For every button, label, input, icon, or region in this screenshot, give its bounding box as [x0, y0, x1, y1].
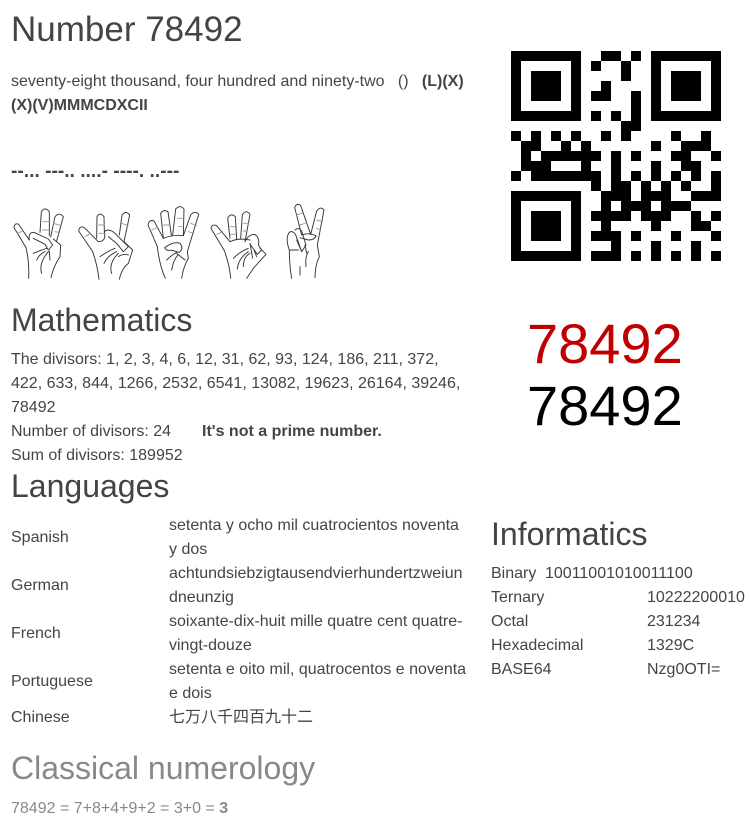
number in words and roman numeral — [11, 73, 464, 114]
text block: divisors: The divisors: 1, 2, 3, 4, 6, 12, 31, 62, 93, 124, 186, 211, 372, — [11, 351, 439, 368]
number in words and roman numeral: (X)(V)MMMCDXCII — [11, 97, 148, 114]
number in words and roman numeral: seventy-eight thousand, four hundred and ninety-two () (L)(X) — [11, 73, 464, 90]
heading: Informatics: Informatics — [491, 516, 647, 552]
big number black: 78492 — [527, 374, 683, 437]
table: languages: setenta e oito mil, quatrocentos e noventa — [169, 661, 466, 678]
table: languages: Portuguese — [11, 673, 93, 690]
table: informatics: BASE64 — [491, 661, 551, 678]
table: languages: e dois — [169, 685, 212, 702]
text block: divisors: Number of divisors: 24 — [11, 423, 171, 440]
table: languages: French — [11, 625, 61, 642]
table: informatics — [491, 565, 745, 678]
heading: Mathematics: Mathematics — [11, 302, 192, 338]
text block: numerology sum: 78492 = 7+8+4+9+2 = 3+0 = 3 — [11, 800, 228, 817]
table: informatics: 10222200010 — [647, 589, 745, 606]
table: informatics: Ternary — [491, 589, 544, 606]
title: Number 78492 — [11, 10, 243, 49]
table: languages: Chinese — [11, 709, 70, 726]
table: informatics: 231234 — [647, 613, 700, 630]
big number red: 78492 — [527, 312, 683, 375]
table: languages: y dos — [169, 541, 207, 558]
table: languages: setenta y ocho mil cuatrocientos noventa — [169, 517, 459, 534]
table: informatics: 10011001010011100 — [545, 565, 693, 582]
table: informatics: 1329C — [647, 637, 694, 654]
table: informatics: Binary — [491, 565, 536, 582]
icon: sign language hands — [14, 204, 324, 280]
table: languages: 七万八千四百九十二 — [169, 709, 313, 726]
morse code: --... ---.. ....- ----. ..--- — [11, 161, 179, 182]
table: languages — [11, 517, 466, 726]
table: informatics: Hexadecimal — [491, 637, 583, 654]
text block: divisors: 422, 633, 844, 1266, 2532, 6541, 13082, 19623, 26164, 39246, — [11, 375, 460, 392]
table: languages: Spanish — [11, 529, 69, 546]
text block: divisors — [11, 351, 460, 464]
table: informatics: Nzg0OTI= — [647, 661, 720, 678]
table: languages: German — [11, 577, 69, 594]
table: languages: dneunzig — [169, 589, 234, 606]
icon: QR code — [511, 51, 721, 261]
heading: Languages: Languages — [11, 468, 169, 504]
text block: divisors: 78492 — [11, 399, 56, 416]
table: languages: soixante-dix-huit mille quatre cent quatre- — [169, 613, 462, 630]
table: languages: achtundsiebzigtausendvierhundertzweiun — [169, 565, 463, 582]
table: informatics: Octal — [491, 613, 528, 630]
heading: Classical numerology: Classical numerology — [11, 750, 315, 786]
table: languages: vingt-douze — [169, 637, 252, 654]
text block: divisors: It's not a prime number. — [202, 423, 382, 440]
text block: divisors: Sum of divisors: 189952 — [11, 447, 183, 464]
